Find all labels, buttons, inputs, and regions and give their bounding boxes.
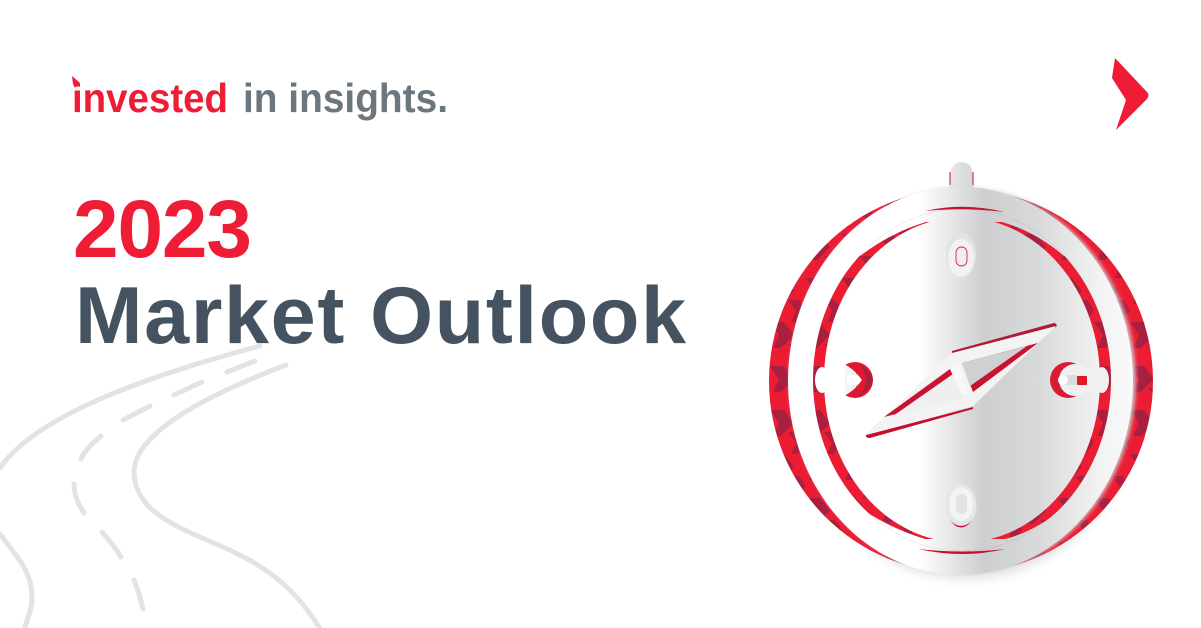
east hole	[1050, 362, 1091, 398]
lower silver cover	[870, 514, 1052, 551]
in insights wordmark: in insights.	[243, 75, 448, 121]
title	[73, 184, 687, 361]
brand mark above the i	[72, 76, 79, 88]
upper silver cover	[860, 209, 1064, 256]
top nub	[946, 162, 977, 192]
year: 2023	[73, 184, 252, 275]
outer red patterned ring	[769, 189, 1153, 573]
right knob	[1095, 367, 1109, 393]
drop shadow	[790, 192, 1142, 580]
silver ring	[788, 187, 1133, 575]
compass needle	[866, 323, 1057, 438]
invested wordmark: invested	[72, 75, 228, 121]
right ring edge shadow	[790, 188, 1136, 574]
red marker	[1077, 376, 1087, 385]
brand line	[72, 75, 448, 121]
needle red edge lower	[866, 407, 973, 438]
north oval	[946, 233, 976, 277]
south oval	[946, 484, 976, 528]
logo arrow	[1112, 58, 1148, 130]
compass face	[824, 218, 1100, 542]
road illustration	[0, 346, 322, 628]
left needle opening	[884, 369, 963, 417]
left knob	[815, 367, 829, 393]
inner red patterned ring	[813, 209, 1111, 551]
market outlook heading: Market Outlook	[75, 271, 687, 361]
top red slit	[925, 207, 1005, 212]
needle red edge upper	[952, 323, 1057, 354]
west hole	[833, 362, 873, 398]
right needle opening	[962, 343, 1038, 392]
needle cross bar	[950, 363, 968, 397]
bottom red slit	[918, 549, 1005, 554]
compass illustration	[769, 162, 1153, 580]
needle body	[866, 326, 1056, 434]
